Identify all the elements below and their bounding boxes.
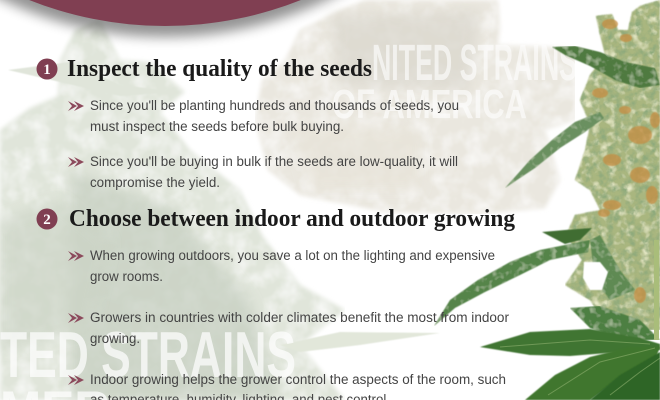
bullet 2.2: growing. — [90, 331, 140, 346]
section 1 — [36, 55, 459, 190]
bullet 1.2 — [68, 154, 458, 190]
leaf: upper spear — [552, 46, 660, 88]
orange pistils — [592, 19, 660, 303]
background: faded green plant — [0, 20, 440, 400]
bullet 1.1: must inspect the seeds before bulk buying. — [90, 119, 344, 134]
watermark: lower — [0, 318, 296, 400]
bullet 2.2 — [68, 310, 510, 346]
bullet 2.3: Indoor growing helps the grower control the aspects of the room, such — [90, 372, 506, 387]
bullet 1.2: Since you'll be buying in bulk if the seeds are low-quality, it will — [90, 154, 458, 169]
number badge 2 — [36, 208, 58, 230]
bullet 2.1: grow rooms. — [90, 269, 163, 284]
dark green bud leaf — [590, 235, 635, 300]
watermark: lower: TED STRAINS — [0, 318, 296, 391]
number badge 1 — [36, 58, 58, 80]
number badge 2: 2 — [43, 212, 51, 228]
watermark: upper: OF AMERICA — [332, 81, 527, 127]
bullet 2.1 — [68, 248, 495, 284]
bullet 2.3 — [68, 372, 506, 400]
heading 1: Inspect the quality of the seeds — [67, 55, 372, 82]
top banner — [0, 0, 537, 37]
section 2 — [36, 205, 516, 400]
bullet 1.1 — [68, 98, 459, 134]
leaf: long left spear — [505, 112, 604, 188]
bullet 1.2: compromise the yield. — [90, 175, 220, 190]
bullet 2.2: Growers in countries with colder climates benefit the most from indoor — [90, 310, 510, 325]
watermark: upper — [332, 34, 577, 127]
leaf: small spear — [542, 228, 592, 244]
window in plant — [583, 262, 608, 290]
bud mass — [565, 0, 660, 330]
background: faded brown bud — [255, 0, 575, 214]
bullet 2.1: When growing outdoors, you save a lot on the lighting and expensive — [90, 248, 495, 263]
bullet 1.1: Since you'll be planting hundreds and thousands of seeds, you — [90, 98, 459, 113]
number badge 1: 1 — [43, 62, 51, 78]
leaf: lower long spear — [434, 240, 590, 326]
heading 2: Choose between indoor and outdoor growing — [69, 205, 516, 232]
big fan leaves — [570, 306, 660, 340]
plant photo: right side — [434, 0, 660, 400]
